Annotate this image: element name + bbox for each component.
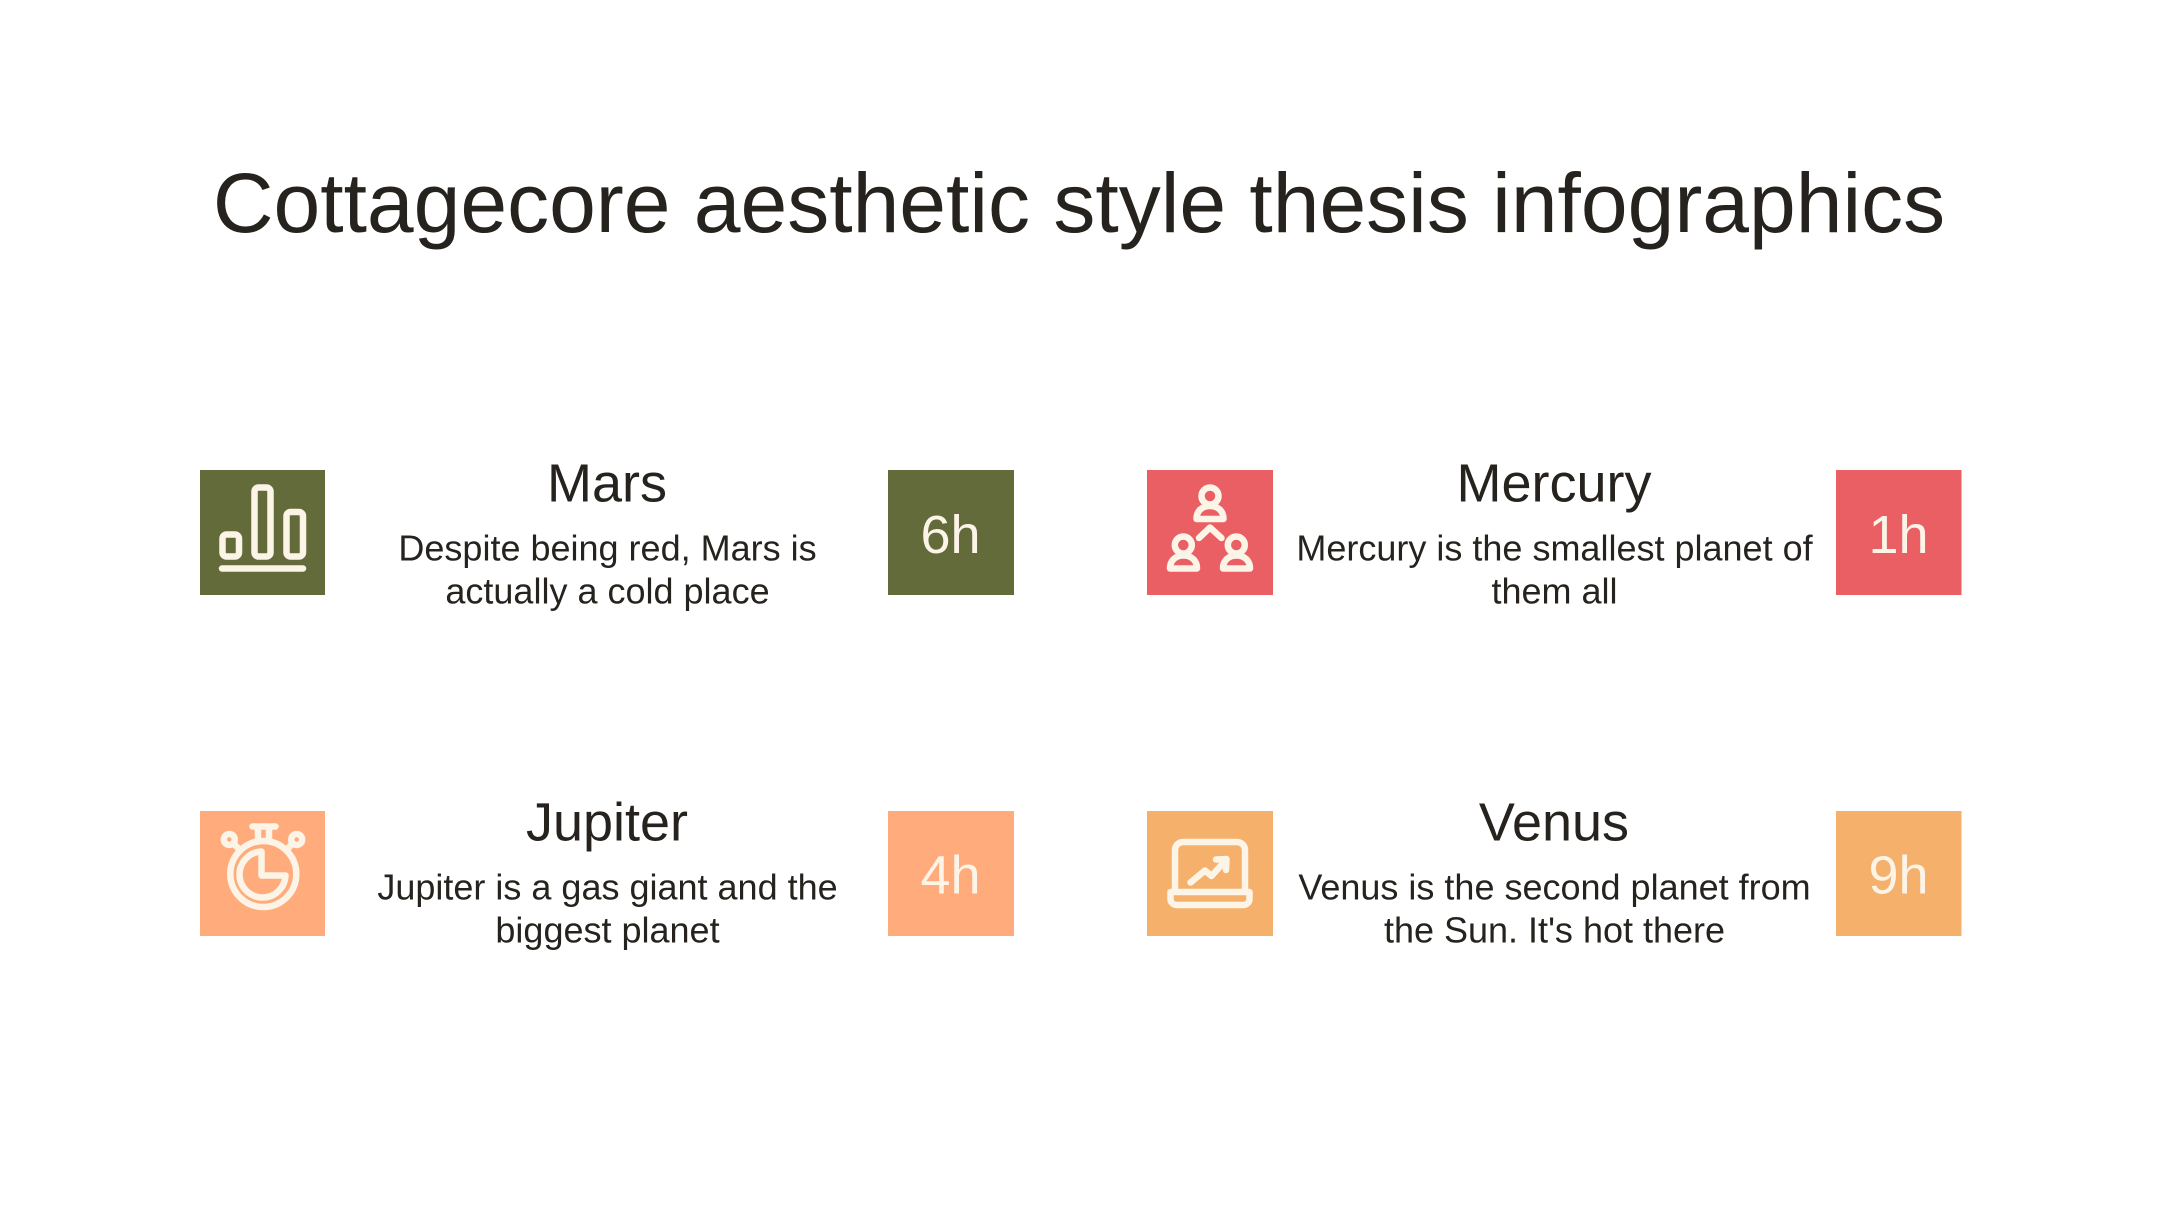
title: Cottagecore aesthetic style thesis infographics: [213, 156, 1945, 250]
heading: Venus: Venus: [1479, 792, 1629, 852]
icon: stopwatch on peach square: [200, 811, 325, 936]
value box: 4h: [888, 811, 1014, 936]
heading: Jupiter: Jupiter: [526, 792, 688, 852]
panel: Mercury: [1147, 454, 1962, 612]
value box: 6h: [888, 470, 1014, 595]
text block: Mercury description: them all: [1491, 570, 1618, 612]
text block: Venus description: the Sun. It's hot there: [1384, 910, 1725, 950]
icon: people hierarchy on red square: [1147, 470, 1273, 595]
icon: laptop with rising chart on orange square: [1147, 811, 1273, 936]
value box: 6h: 6h: [920, 505, 981, 565]
text block: Mercury description: Mercury is the smallest planet of: [1296, 528, 1814, 568]
text block: Jupiter description: biggest planet: [495, 910, 720, 950]
value box: 1h: [1836, 470, 1962, 595]
icon: bar chart on olive square: [200, 470, 325, 595]
text block: Venus description: Venus is the second planet from: [1298, 866, 1811, 908]
value box: 9h: 9h: [1868, 846, 1929, 906]
value box: 1h: 1h: [1868, 505, 1929, 565]
text block: Mars description: actually a cold place: [445, 570, 770, 612]
heading: Mars: Mars: [547, 454, 667, 514]
panel: Mars: [200, 454, 1014, 612]
value box: 4h: 4h: [920, 846, 981, 906]
text block: Jupiter description: Jupiter is a gas giant and the: [377, 866, 838, 908]
heading: Mercury: Mercury: [1456, 454, 1652, 514]
value box: 9h: [1836, 811, 1962, 936]
text block: Mars description: Despite being red, Mars is: [398, 528, 817, 568]
panel: Jupiter: [200, 792, 1014, 950]
panel: Venus: [1147, 792, 1962, 950]
